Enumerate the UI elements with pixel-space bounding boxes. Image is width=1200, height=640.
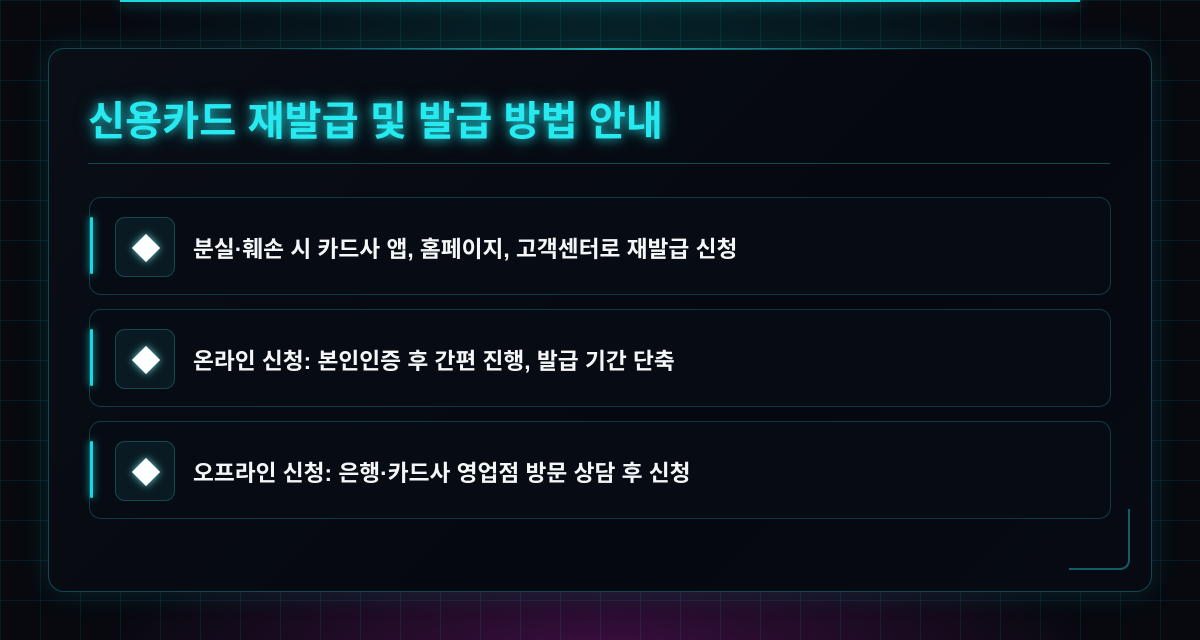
item 1 <box>89 197 1111 295</box>
item 2 <box>89 309 1111 407</box>
text 3: 오프라인 신청: 은행·카드사 영업점 방문 상담 후 신청 <box>193 460 691 486</box>
icon: diamond <box>115 329 175 389</box>
corner bracket decoration <box>1069 509 1130 570</box>
title: 신용카드 재발급 및 발급 방법 안내 <box>88 99 663 144</box>
icon: diamond <box>115 217 175 277</box>
text 2: 온라인 신청: 본인인증 후 간편 진행, 발급 기간 단축 <box>193 348 675 374</box>
text 1: 분실·훼손 시 카드사 앱, 홈페이지, 고객센터로 재발급 신청 <box>193 236 737 262</box>
icon: diamond <box>115 441 175 501</box>
item 3 <box>89 421 1111 519</box>
panel: main card <box>48 48 1152 592</box>
